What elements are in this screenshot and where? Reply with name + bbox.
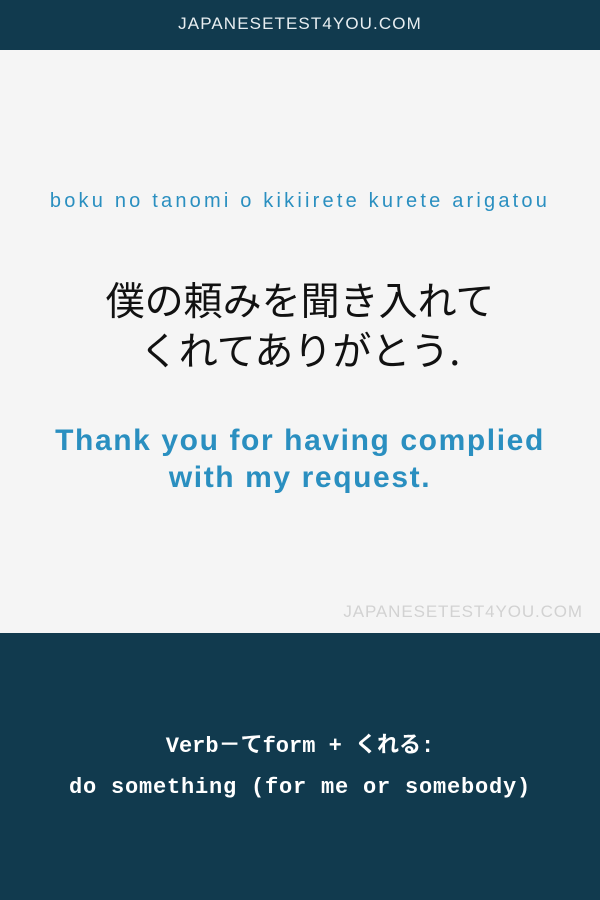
grammar meaning: do something (for me or somebody) <box>69 775 531 800</box>
japanese sentence: くれてありがとう. <box>140 321 460 377</box>
watermark: JAPANESETEST4YOU.COM <box>343 602 583 621</box>
romaji line: boku no tanomi o kikiirete kurete arigatou <box>50 190 550 212</box>
header site name: JAPANESETEST4YOU.COM <box>178 14 422 33</box>
header bar <box>0 0 600 50</box>
footer panel: grammar <box>0 633 600 900</box>
japanese sentence: 僕の頼みを聞き入れて <box>106 271 494 327</box>
english translation <box>55 424 545 494</box>
english translation: Thank you for having complied <box>55 424 545 457</box>
grammar pattern: Verb－てform + くれる: <box>166 734 434 759</box>
japanese sentence <box>106 271 494 377</box>
english translation: with my request. <box>169 461 431 494</box>
